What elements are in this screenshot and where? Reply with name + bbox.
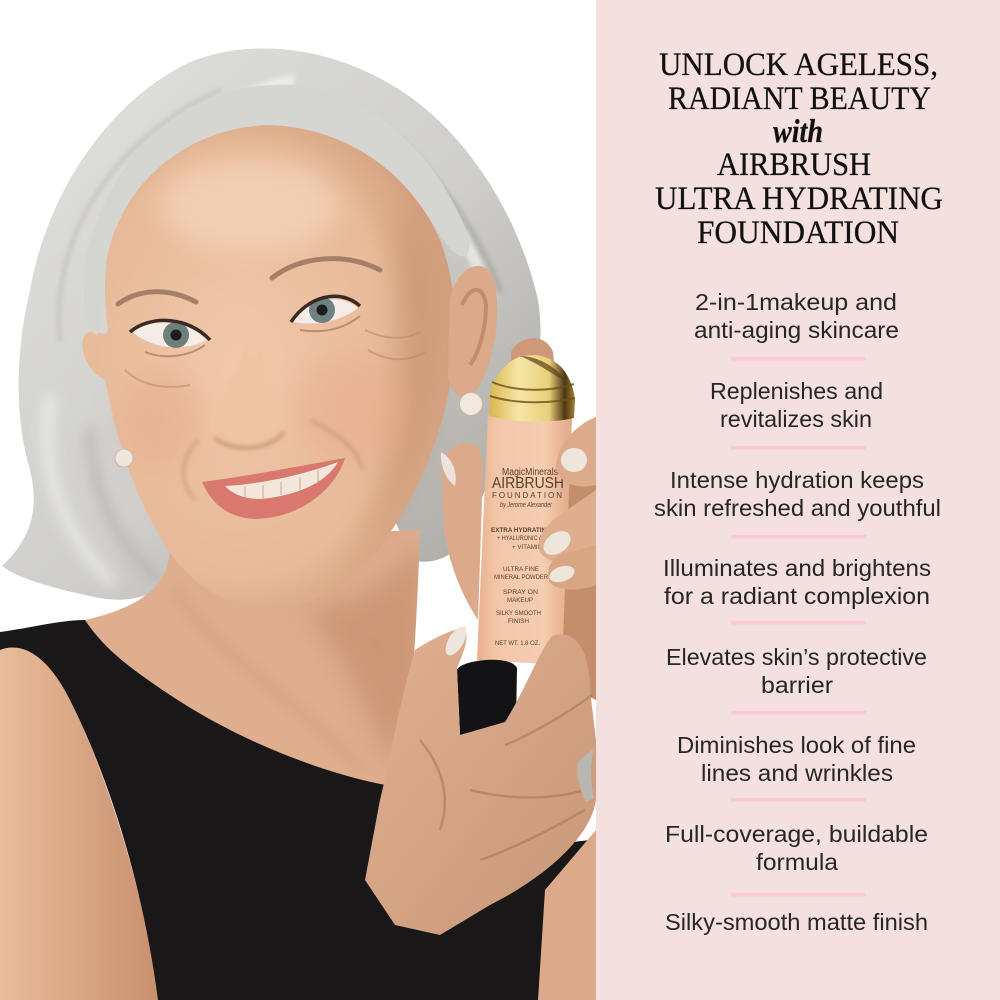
title: with	[773, 114, 823, 150]
bottle label text: SPRAY ON	[503, 590, 538, 596]
bottle label text: ULTRA FINE	[503, 567, 539, 573]
photo background	[0, 0, 596, 1000]
ring	[577, 748, 594, 802]
bottle label text: by Jerome Alexander	[500, 502, 553, 509]
bottle label text: + VITAMIN E	[512, 545, 548, 551]
benefit: coverage	[665, 821, 928, 875]
benefit: matte finish: Silky-smooth matte finish	[665, 909, 928, 935]
benefit: 2-in-1: anti-aging skincare	[694, 317, 899, 343]
benefit: 2-in-1	[694, 289, 899, 343]
right forearm	[538, 830, 596, 1000]
forehead highlight	[160, 160, 340, 250]
benefit: replenishes	[710, 378, 883, 432]
face shading	[373, 226, 441, 531]
bottle label text: FOUNDATION	[492, 491, 562, 500]
benefit: fine lines	[677, 732, 916, 786]
pearl earring right	[460, 392, 482, 416]
bottle label text: MagicMinerals	[502, 467, 558, 478]
left eye	[130, 320, 210, 356]
cheek blush	[112, 378, 196, 460]
right fingers	[539, 417, 596, 590]
benefit: hydration: Intense hydration keeps	[670, 467, 924, 493]
benefit: replenishes: Replenishes and	[710, 378, 883, 404]
benefit: barrier: barrier	[761, 672, 833, 698]
title: UNLOCK AGELESS,	[659, 47, 938, 83]
benefit: coverage: Full-coverage, buildable	[665, 821, 928, 847]
benefit: replenishes: revitalizes skin	[720, 406, 872, 432]
bottle label text: FINISH	[508, 619, 529, 625]
black bottle cap	[457, 660, 517, 735]
portrait photo: woman holding bottle	[0, 48, 596, 1000]
bottle label text: MAKEUP	[507, 598, 533, 604]
title: FOUNDATION	[697, 215, 899, 251]
right panel background	[596, 0, 1000, 1000]
finger nails	[561, 448, 587, 472]
black sleeveless top	[0, 620, 590, 1000]
nose	[210, 340, 286, 449]
benefit: illuminates: Illuminates and brightens	[663, 555, 931, 581]
title: ULTRA HYDRATING	[655, 181, 943, 217]
mouth	[202, 458, 345, 519]
left thumb	[442, 443, 482, 620]
bottle	[477, 355, 575, 665]
smile lines	[183, 420, 362, 500]
benefit: barrier	[666, 644, 927, 698]
bottle label text: NET WT. 1.8 OZ.	[495, 641, 540, 647]
bottle label text: AIRBRUSH	[492, 475, 564, 492]
lower hand	[365, 623, 596, 935]
hand creases	[420, 695, 592, 860]
benefit: hydration: skin refreshed and youthful	[654, 495, 941, 521]
benefit: coverage: formula	[756, 849, 839, 875]
eye wrinkles	[125, 330, 425, 387]
palm behind bottle	[563, 484, 596, 700]
title	[655, 47, 943, 251]
eyebrows	[118, 259, 380, 304]
pearl earring left	[115, 449, 133, 467]
neck and chest	[85, 530, 420, 785]
face	[82, 125, 455, 608]
bottle label text: SILKY SMOOTH	[496, 611, 541, 617]
cap grooves	[490, 382, 575, 402]
benefit: barrier: Elevates skin’s protective	[666, 644, 927, 670]
bottle label text: EXTRA HYDRATING	[491, 527, 551, 534]
finger behind cap	[511, 338, 554, 362]
gold cap	[489, 355, 575, 422]
bottle label text	[491, 467, 564, 647]
benefit: illuminates: for a radiant complexion	[664, 583, 930, 609]
right eye	[291, 296, 360, 331]
title: AIRBRUSH	[717, 147, 871, 183]
hair fringe over forehead	[83, 85, 470, 335]
ear	[448, 266, 497, 397]
thumb nail	[441, 452, 456, 486]
benefit: fine lines: Diminishes look of fine	[677, 732, 916, 758]
hair strands	[48, 80, 500, 580]
lower thumb nail	[446, 626, 466, 656]
title: RADIANT BEAUTY	[668, 81, 931, 117]
bottle body	[477, 415, 572, 665]
benefit: illuminates	[663, 555, 931, 609]
benefit: fine lines: lines and wrinkles	[701, 760, 893, 786]
benefit: 2-in-1: 2-in-1makeup and	[695, 289, 897, 315]
bottle label text: MINERAL POWDER	[494, 575, 549, 581]
benefit: hydration	[654, 467, 941, 521]
neck shadow	[311, 550, 419, 756]
left arm	[0, 647, 160, 1000]
bottle label text: + HYALURONIC ACID	[497, 536, 553, 542]
silver hair	[2, 48, 540, 600]
